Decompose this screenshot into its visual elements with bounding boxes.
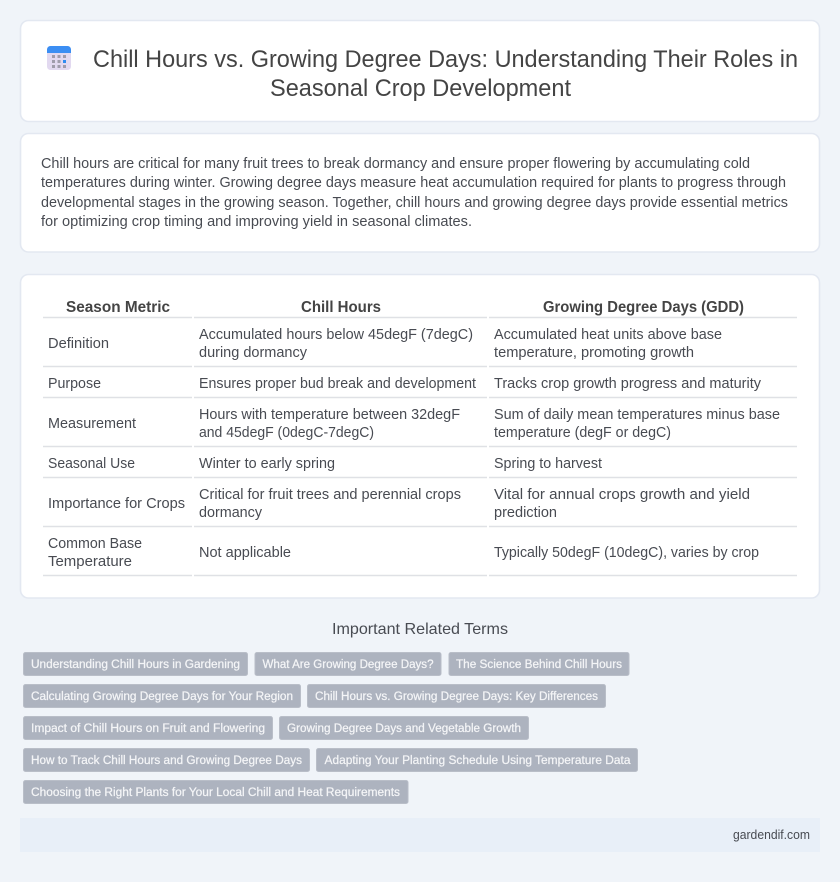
row: importance for crops: Critical for fruit trees and perennial crops xyxy=(199,487,461,503)
text: description paragraph xyxy=(41,156,788,230)
row: definition: Definition xyxy=(48,336,109,352)
row: purpose xyxy=(48,376,762,392)
panel: related term tags xyxy=(24,652,638,804)
row: definition xyxy=(48,327,722,361)
table header: Growing Degree Days (GDD) xyxy=(543,299,744,316)
row: measurement xyxy=(48,407,780,441)
row: measurement: temperature (degF or degC) xyxy=(494,425,671,441)
row: seasonal use: Winter to early spring xyxy=(199,456,335,472)
tag row 3 xyxy=(24,716,528,740)
row: measurement: and 45degF (0degC-7degC) xyxy=(199,425,374,441)
row: common base temperature: Temperature xyxy=(48,554,132,570)
row: importance for crops: dormancy xyxy=(199,505,263,521)
table header: Chill Hours xyxy=(301,299,381,316)
row: importance for crops: Vital for annual crops growth and yield xyxy=(494,487,750,503)
icon: calendar xyxy=(47,46,71,70)
heading: related terms: Important Related Terms xyxy=(332,621,508,638)
text: description paragraph: for optimizing crop timing and improving yield in seasonal climates. xyxy=(41,214,472,230)
row: purpose: Purpose xyxy=(48,376,101,392)
panel: description xyxy=(20,134,820,252)
tag row 4: Adapting Your Planting Schedule Using Temperature Data xyxy=(324,753,631,767)
tag row 5: Choosing the Right Plants for Your Local Chill and Heat Requirements xyxy=(31,785,400,799)
tag row 1: What Are Growing Degree Days? xyxy=(262,657,434,671)
table header: Season Metric xyxy=(66,299,170,316)
row: importance for crops: Importance for Crops xyxy=(48,496,185,512)
row: importance for crops xyxy=(48,487,750,521)
tag row 3: Impact of Chill Hours on Fruit and Flowering xyxy=(31,721,265,735)
tag row 5 xyxy=(24,780,408,804)
row: definition: during dormancy xyxy=(199,345,308,361)
text: description paragraph: developmental stages in the growing season. Together, chill hours and growing degree days provide essential metrics xyxy=(41,195,788,211)
row: seasonal use: Spring to harvest xyxy=(494,456,602,472)
tag row 3: Growing Degree Days and Vegetable Growth xyxy=(287,721,521,735)
footer xyxy=(20,818,820,852)
tag row 4: How to Track Chill Hours and Growing Degree Days xyxy=(31,753,302,767)
row: importance for crops: prediction xyxy=(494,505,557,521)
row: purpose: Tracks crop growth progress and maturity xyxy=(494,376,762,392)
row: measurement: Hours with temperature between 32degF xyxy=(199,407,460,423)
tag row 1: The Science Behind Chill Hours xyxy=(456,657,622,671)
tag row 2: Calculating Growing Degree Days for Your Region xyxy=(31,689,293,703)
panel: comparison table xyxy=(20,274,820,598)
footer: gardendif.com xyxy=(733,828,810,842)
title xyxy=(93,46,798,102)
row: definition: temperature, promoting growth xyxy=(494,345,694,361)
tag row 2 xyxy=(24,684,606,708)
row: definition: Accumulated heat units above base xyxy=(494,327,722,343)
text: description paragraph: temperatures during winter. Growing degree days measure heat accumulation required for plants to progress through xyxy=(41,175,786,191)
row: purpose: Ensures proper bud break and development xyxy=(199,376,476,392)
row: definition: Accumulated hours below 45degF (7degC) xyxy=(199,327,473,343)
tag row 4 xyxy=(24,748,638,772)
row: measurement: Sum of daily mean temperatures minus base xyxy=(494,407,780,423)
row: common base temperature: Typically 50degF (10degC), varies by crop xyxy=(494,545,759,561)
tag row 1 xyxy=(24,652,629,676)
row: seasonal use: Seasonal Use xyxy=(48,456,135,472)
row: seasonal use xyxy=(48,456,602,472)
title: Chill Hours vs. Growing Degree Days: Understanding Their Roles in xyxy=(93,46,798,73)
row: common base temperature: Common Base xyxy=(48,536,142,552)
tag row 2: Chill Hours vs. Growing Degree Days: Key Differences xyxy=(315,689,598,703)
table header xyxy=(66,299,744,316)
title: Seasonal Crop Development xyxy=(270,75,571,102)
tag row 1: Understanding Chill Hours in Gardening xyxy=(31,657,240,671)
row: common base temperature xyxy=(48,536,759,570)
text: description paragraph: Chill hours are critical for many fruit trees to break dormancy and ensure proper flowering by accumulating cold xyxy=(41,156,750,172)
row: common base temperature: Not applicable xyxy=(199,545,291,561)
panel: title card xyxy=(20,20,820,122)
row: measurement: Measurement xyxy=(48,416,136,432)
